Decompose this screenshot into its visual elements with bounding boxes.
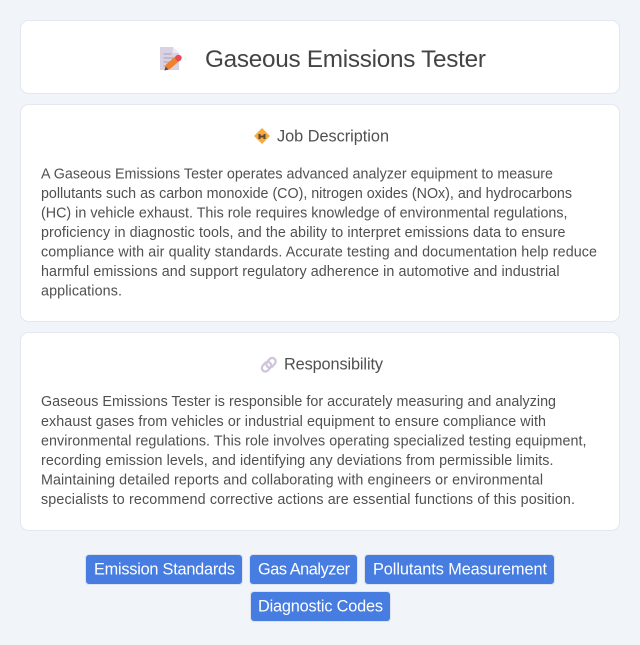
text block: responsibility <box>41 394 586 508</box>
panel: responsibility <box>20 332 620 530</box>
tag: pollutants measurement <box>364 554 554 584</box>
text block: job description: applications. <box>41 283 122 299</box>
text block: job description: (HC) in vehicle exhaust. This role requires knowledge of environmental regulations, <box>41 205 568 221</box>
tag: diagnostic codes <box>250 592 390 622</box>
heading: job description: Job Description <box>277 127 389 145</box>
title: Gaseous Emissions Tester <box>205 46 486 73</box>
tag: emission standards <box>86 554 242 584</box>
text block: responsibility: environmental regulations. This role involves operating specialized testing equipment, <box>41 433 586 449</box>
text block: job description <box>41 166 597 299</box>
heading: responsibility: Responsibility <box>284 355 384 373</box>
text block: job description: A Gaseous Emissions Tester operates advanced analyzer equipment to measure <box>41 166 553 182</box>
text block: responsibility: Maintaining detailed reports and collaborating with engineers or environmental <box>41 472 543 488</box>
text block: responsibility: Gaseous Emissions Tester is responsible for accurately measuring and analyzing <box>41 394 556 410</box>
tag: pollutants measurement: Pollutants Measurement <box>373 560 547 578</box>
tag: emission standards: Emission Standards <box>94 560 235 578</box>
icon: chain link <box>260 357 277 373</box>
icon: document with pencil <box>160 47 182 70</box>
panel: job description <box>20 104 620 322</box>
text block: job description: proficiency in diagnostic tools, and the ability to interpret emissions data to ensure <box>41 225 566 241</box>
icon: diamond road sign <box>254 128 270 144</box>
panel: title card <box>20 20 620 94</box>
tag: gas analyzer <box>250 554 358 584</box>
text block: responsibility: specialists to recommend corrective actions are essential functions of this position. <box>41 492 575 508</box>
text block: responsibility: exhaust gases from vehicles or industrial equipment to ensure compliance with <box>41 414 546 430</box>
tag: gas analyzer: Gas Analyzer <box>258 560 351 578</box>
text block: responsibility: recording emission levels, and identifying any deviations from permissible limits. <box>41 453 554 469</box>
text block: job description: compliance with air quality standards. Accurate testing and documentation help reduce <box>41 244 597 260</box>
tag: diagnostic codes: Diagnostic Codes <box>258 598 383 616</box>
text block: job description: harmful emissions and support regulatory adherence in automotive and industrial <box>41 264 560 280</box>
text block: job description: pollutants such as carbon monoxide (CO), nitrogen oxides (NOx), and hydrocarbons <box>41 186 572 202</box>
